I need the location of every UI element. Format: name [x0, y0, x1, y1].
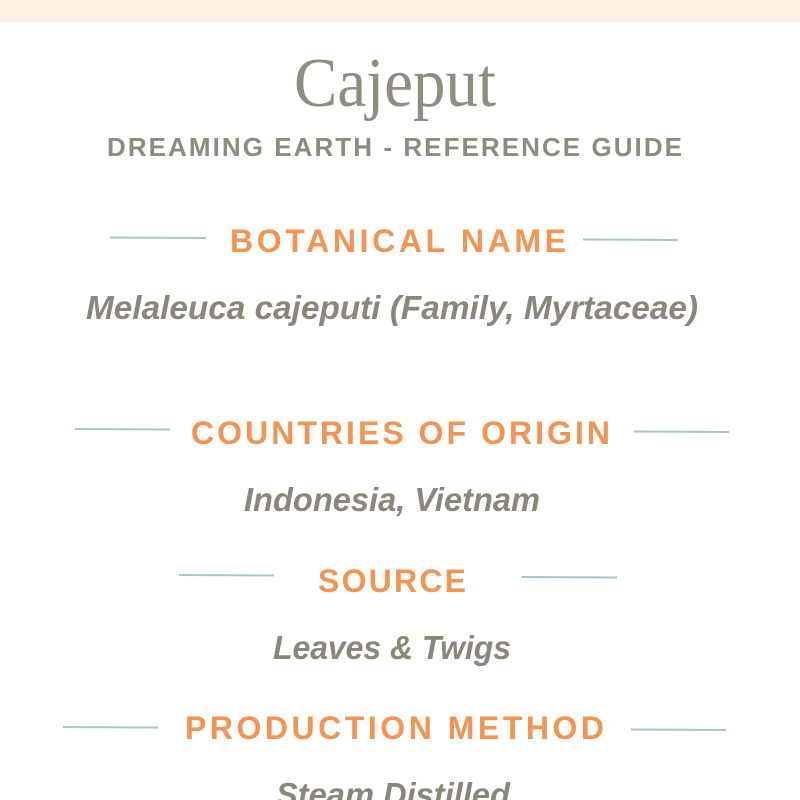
section: botanical name — [86, 223, 698, 326]
heading: source: SOURCE — [318, 563, 466, 599]
section: countries of origin — [75, 415, 729, 518]
heading: countries of origin: COUNTRIES OF ORIGIN — [191, 415, 610, 451]
text: countries value: Indonesia, Vietnam — [244, 481, 540, 518]
subtitle: DREAMING EARTH - REFERENCE GUIDE — [107, 132, 682, 162]
text: botanical name value: Melaleuca cajeputi (Family, Myrtaceae) — [86, 289, 698, 326]
heading: botanical name: BOTANICAL NAME — [230, 223, 566, 259]
title: Cajeput — [294, 45, 497, 122]
section: production method — [63, 710, 726, 800]
section: source — [179, 563, 617, 666]
heading: production method: PRODUCTION METHOD — [185, 710, 604, 746]
top band — [0, 0, 800, 22]
text: source value: Leaves & Twigs — [273, 629, 511, 666]
